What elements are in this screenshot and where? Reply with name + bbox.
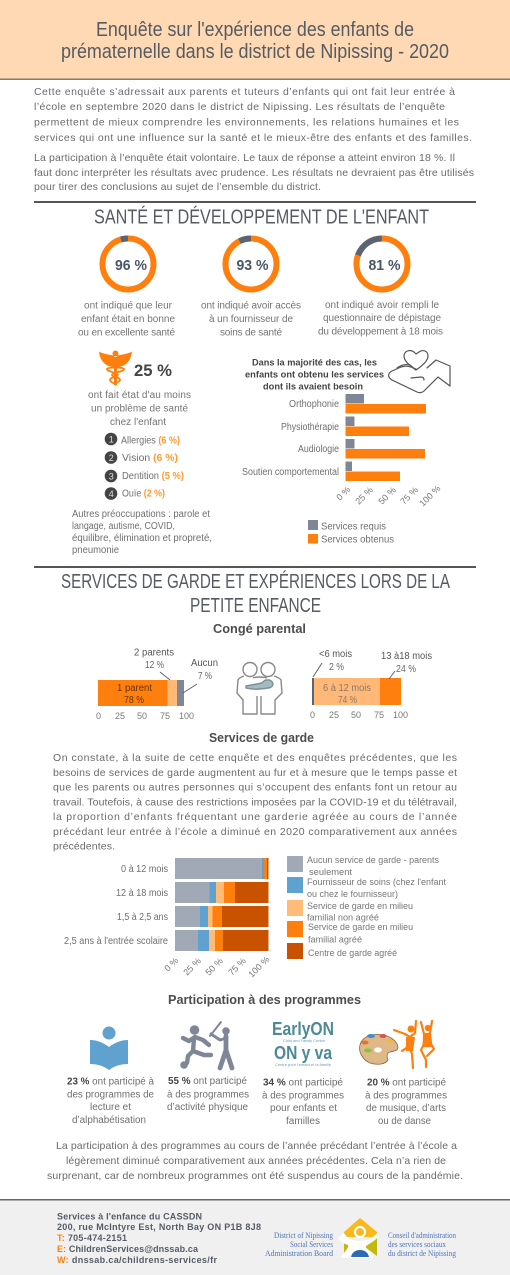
subheading: participation: Participation à des programmes [168, 993, 361, 1007]
chart: parental leave parents: 1 parent [117, 683, 152, 694]
program 55 %: à des programmes [167, 1090, 249, 1100]
ranked list of health problems: 3 [109, 471, 114, 481]
intro text: pour tirer des conclusions au sujet de l’ensemble du district. [34, 181, 321, 193]
program 55 %: 55 % ont participé [168, 1076, 247, 1087]
paragraph: child care [53, 752, 457, 852]
program 34 %: 34 % ont participé [263, 1078, 343, 1088]
legend: child care: familial agréé [308, 934, 362, 944]
chart: parental leave parents [96, 648, 218, 721]
donut 81 % [349, 231, 415, 297]
donut 96 % [97, 233, 159, 295]
other concerns [72, 509, 212, 556]
chart: parental leave duration: 74 % [338, 695, 357, 706]
donut 93 %: 93 % [236, 257, 268, 274]
chart: parental leave duration: 0 [310, 710, 315, 720]
chart: parental leave parents: 25 [115, 711, 125, 721]
program 20 % [365, 1078, 447, 1127]
caption 81 % [318, 300, 443, 338]
contact details [57, 1212, 261, 1265]
paragraph: child care: la proportion d’enfants fréquentant une garderie agréée au cours de l’année [53, 811, 457, 823]
caption 25 %: chez l'enfant [110, 417, 166, 428]
heading: services de garde [61, 570, 450, 617]
stacked bar chart: child care by age: 100 % [246, 954, 271, 979]
ranked list of health problems: Ouïe (2 %) [122, 488, 165, 500]
caption 25 % [88, 390, 191, 428]
bar chart: services: 75 % [398, 485, 420, 506]
icon: paint palette [360, 1034, 398, 1064]
services heading: Dans la majorité des cas, les [252, 358, 377, 368]
caption 25 %: ont fait état d'au moins [88, 390, 191, 401]
chart: parental leave duration: 24 % [396, 664, 416, 675]
stacked bar chart: child care by age: 25 % [181, 956, 203, 977]
bar chart: services [242, 394, 442, 508]
donut 93 % [217, 230, 285, 298]
stacked bar chart: child care by age: 0 à 12 mois [121, 864, 168, 875]
intro text: permettent de mieux comprendre les environnements, les relations humaines et les [34, 116, 459, 128]
other concerns: équilibre, élimination et propreté, [72, 533, 212, 544]
header banner [0, 0, 510, 80]
ranked list of health problems: Allergies (6 %) [121, 436, 180, 446]
chart: parental leave parents: 2 parents [134, 648, 174, 658]
legend: child care: Service de garde en milieu [307, 901, 413, 911]
caption 81 %: questionnaire de dépistage [323, 313, 441, 324]
paragraph: child care: précédentes. [53, 840, 115, 852]
bar chart: services: 25 % [353, 485, 375, 506]
ranked list of health problems: Vision (6 %) [122, 453, 178, 464]
services heading [245, 358, 384, 392]
program 34 %: familles [286, 1116, 320, 1127]
icon: caduceus [99, 350, 132, 385]
chart: parental leave parents: 75 [160, 711, 170, 721]
icon: open book [90, 1026, 128, 1070]
caption 93 %: à un fournisseur de [209, 314, 293, 325]
legend: child care: Centre de garde agréé [308, 948, 397, 958]
program 55 % [167, 1076, 249, 1113]
chart: parental leave parents: Aucun [191, 658, 218, 669]
contact details: Services à l'enfance du CASSDN [57, 1212, 202, 1222]
bar chart: services: 100 % [417, 483, 442, 508]
program 55 %: d’activité physique [167, 1102, 248, 1113]
icon: parents with baby [237, 662, 282, 714]
caption 96 %: enfant était en bonne [81, 314, 175, 325]
chart: parental leave duration: <6 mois [319, 649, 352, 660]
program 20 %: à des programmes [365, 1090, 447, 1102]
closing paragraph: surprenant, car de nombreux programmes ont été suspendus au cours de la pandémie. [47, 1170, 463, 1182]
chart: parental leave duration: 25 [329, 710, 339, 720]
donut 96 %: 96 % [115, 257, 147, 274]
legend: child care: Fournisseur de soins (chez l'enfant [307, 877, 446, 887]
board name, English: District of Nipissing [274, 1231, 333, 1240]
intro text: services qui ont une influence sur la santé et le mieux-être des enfants et des familles. [34, 132, 472, 144]
subheading: services de garde: Services de garde [209, 731, 314, 745]
header banner: Enquête sur l'expérience des enfants de [96, 19, 414, 41]
chart: parental leave duration: 50 [351, 710, 361, 720]
intro text: l’école en septembre 2020 dans le district de Nipissing. Les résultats de l’enquête [34, 101, 445, 113]
stacked bar chart: child care by age: 12 à 18 mois [116, 888, 168, 899]
legend: services [308, 520, 394, 546]
paragraph: child care: besoins de services de garde augmentent au fur et à mesure que le temps passe et [53, 767, 457, 779]
board name, English [265, 1231, 333, 1258]
contact details: 200, rue McIntyre Est, North Bay ON P1B 8J8 [57, 1222, 261, 1232]
chart: parental leave parents: 0 [96, 711, 101, 721]
header banner: prématernelle dans le district de Nipissing - 2020 [61, 41, 449, 63]
closing paragraph [47, 1140, 463, 1182]
footer [0, 1199, 510, 1275]
stacked bar chart: child care by age: 2,5 ans à l'entrée scolaire [64, 936, 168, 947]
bar chart: services: 50 % [376, 485, 398, 506]
chart: parental leave duration: 75 [374, 710, 384, 720]
logo: DNSSAB [338, 1218, 377, 1258]
caption 25 %: un problème de santé [91, 404, 188, 414]
intro text: La participation à l’enquête était volontaire. Le taux de réponse a atteint environ 18 %. Il [34, 152, 455, 164]
bar chart: services: Orthophonie [289, 399, 339, 410]
ranked list of health problems: Dentition (5 %) [122, 471, 184, 482]
chart: parental leave parents: 7 % [198, 671, 212, 682]
caption 96 %: ont indiqué que leur [84, 300, 173, 312]
bar chart: services: Audiologie [298, 444, 339, 455]
other concerns: Autres préoccupations : parole et [72, 509, 210, 520]
bar chart: services: Soutien comportemental [242, 467, 339, 478]
caption 96 %: ou en excellente santé [78, 328, 175, 338]
subheading: congé parental: Congé parental [213, 622, 306, 636]
paragraph: child care: On constate, à la suite de cette enquête et des enquêtes précédentes, que les [53, 752, 457, 764]
chart: parental leave parents: 100 [179, 711, 194, 721]
program 23 %: lecture et [90, 1102, 131, 1113]
board name, French: du district de Nipissing [388, 1249, 456, 1258]
program 23 % [67, 1076, 154, 1126]
bar chart: services: 0 % [334, 484, 352, 502]
legend: child care: seulement [309, 867, 353, 877]
legend: child care: Service de garde en milieu [308, 922, 413, 932]
board name, English: Social Services [290, 1240, 333, 1249]
logo: EarlyON / ON y va: ON y va [274, 1043, 333, 1063]
caption 81 %: du développement à 18 mois [318, 326, 443, 338]
logo: EarlyON / ON y va [272, 1019, 334, 1067]
board name, French: Conseil d'administration [388, 1231, 456, 1240]
contact details: E: ChildrenServices@dnssab.ca [57, 1244, 199, 1254]
icon: dancers [394, 1021, 434, 1068]
legend: child care: Aucun service de garde - parents [307, 855, 439, 865]
other concerns: pneumonie [72, 545, 119, 556]
legend: child care [287, 855, 446, 959]
program 34 % [262, 1078, 344, 1127]
ranked list of health problems: 1 [109, 434, 114, 444]
ranked list of health problems: 2 [109, 453, 114, 463]
bar chart: services: Physiothérapie [281, 422, 339, 433]
chart: parental leave duration: 2 % [329, 662, 344, 673]
stacked bar chart: child care by age [64, 858, 271, 979]
closing paragraph: La participation à des programmes au cours de l’année précédant l’entrée à l’école a [56, 1140, 457, 1152]
caption 96 % [78, 300, 175, 338]
caption 93 % [201, 300, 301, 338]
program 34 %: à des programmes [262, 1090, 344, 1102]
services heading: enfants ont obtenu les services [245, 370, 384, 380]
stacked bar chart: child care by age: 75 % [226, 956, 248, 977]
chart: parental leave duration: 6 à 12 mois [323, 683, 371, 694]
legend: child care: ou chez le fournisseur) [307, 889, 398, 899]
heading: services de garde: PETITE ENFANCE [190, 595, 321, 617]
board name, English: Administration Board [265, 1249, 333, 1258]
program 20 %: 20 % ont participé [367, 1078, 446, 1088]
intro text: faut donc interpréter les résultats avec prudence. Les résultats ne devraient pas être utilisés [34, 167, 474, 179]
caption 93 %: ont indiqué avoir accès [201, 300, 301, 312]
caption 81 %: ont indiqué avoir rempli le [325, 300, 439, 311]
program 23 %: d’alphabétisation [72, 1115, 146, 1126]
intro text: Cette enquête s’adressait aux parents et tuteurs d’enfants qui ont fait leur entrée à [34, 86, 455, 98]
heading: santé: SANTÉ ET DÉVELOPPEMENT DE L'ENFANT [94, 206, 429, 228]
chart: parental leave parents: 78 % [124, 695, 144, 706]
logo: EarlyON / ON y va: Child and Family Centre [283, 1038, 326, 1043]
program 20 %: ou de danse [378, 1116, 431, 1127]
services heading: dont ils avaient besoin [263, 382, 363, 392]
contact details: W: dnssab.ca/childrens-services/fr [57, 1255, 217, 1265]
paragraph: child care: que les parents ou autres personnes qui s’occupent des enfants font un retour au [53, 782, 457, 794]
chart: parental leave duration [310, 649, 432, 720]
closing paragraph: légèrement diminué comparativement aux années précédentes. Cela n’a rien de [66, 1155, 446, 1167]
paragraph: child care: travail. Toutefois, à cause des restrictions imposées par la COVID-19 et du télétravail, [53, 796, 457, 808]
intro text [34, 86, 474, 193]
stacked bar chart: child care by age: 0 % [162, 955, 180, 973]
program 23 %: des programmes de [67, 1090, 154, 1100]
program 23 %: 23 % ont participé à [67, 1076, 154, 1088]
program 34 %: pour enfants et [270, 1103, 337, 1114]
paragraph: child care: précédant leur entrée à l’école a diminué en 2020 comparativement aux années [53, 826, 457, 838]
chart: parental leave duration: 100 [393, 710, 408, 720]
icon: sports figures [180, 1022, 232, 1069]
ranked list of health problems: 4 [109, 489, 114, 499]
legend: child care: familial non agréé [307, 912, 379, 922]
logo: EarlyON / ON y va: EarlyON [272, 1019, 334, 1039]
chart: parental leave parents: 50 [137, 711, 147, 721]
icon: hand with heart [389, 351, 450, 393]
legend: services: Services requis [321, 522, 386, 532]
legend: services: Services obtenus [321, 534, 394, 546]
chart: parental leave parents: 12 % [145, 660, 164, 671]
stacked bar chart: child care by age: 1,5 à 2,5 ans [117, 912, 168, 923]
chart: parental leave duration: 13 à18 mois [381, 651, 432, 662]
ranked list of health problems [105, 433, 184, 500]
board name, French: des services sociaux [388, 1240, 446, 1249]
stacked bar chart: child care by age: 50 % [203, 956, 225, 977]
logo: EarlyON / ON y va: Centre pour l'enfant et la famille [275, 1062, 332, 1067]
contact details: T: 705-474-2151 [57, 1233, 127, 1243]
donut 81 %: 81 % [368, 257, 400, 274]
other concerns: langage, autisme, COVID, [72, 521, 175, 532]
stat 25 %: 25 % [134, 362, 172, 380]
program 20 %: de musique, d’arts [366, 1103, 446, 1114]
caption 93 %: soins de santé [220, 328, 282, 338]
board name, French [388, 1231, 456, 1258]
